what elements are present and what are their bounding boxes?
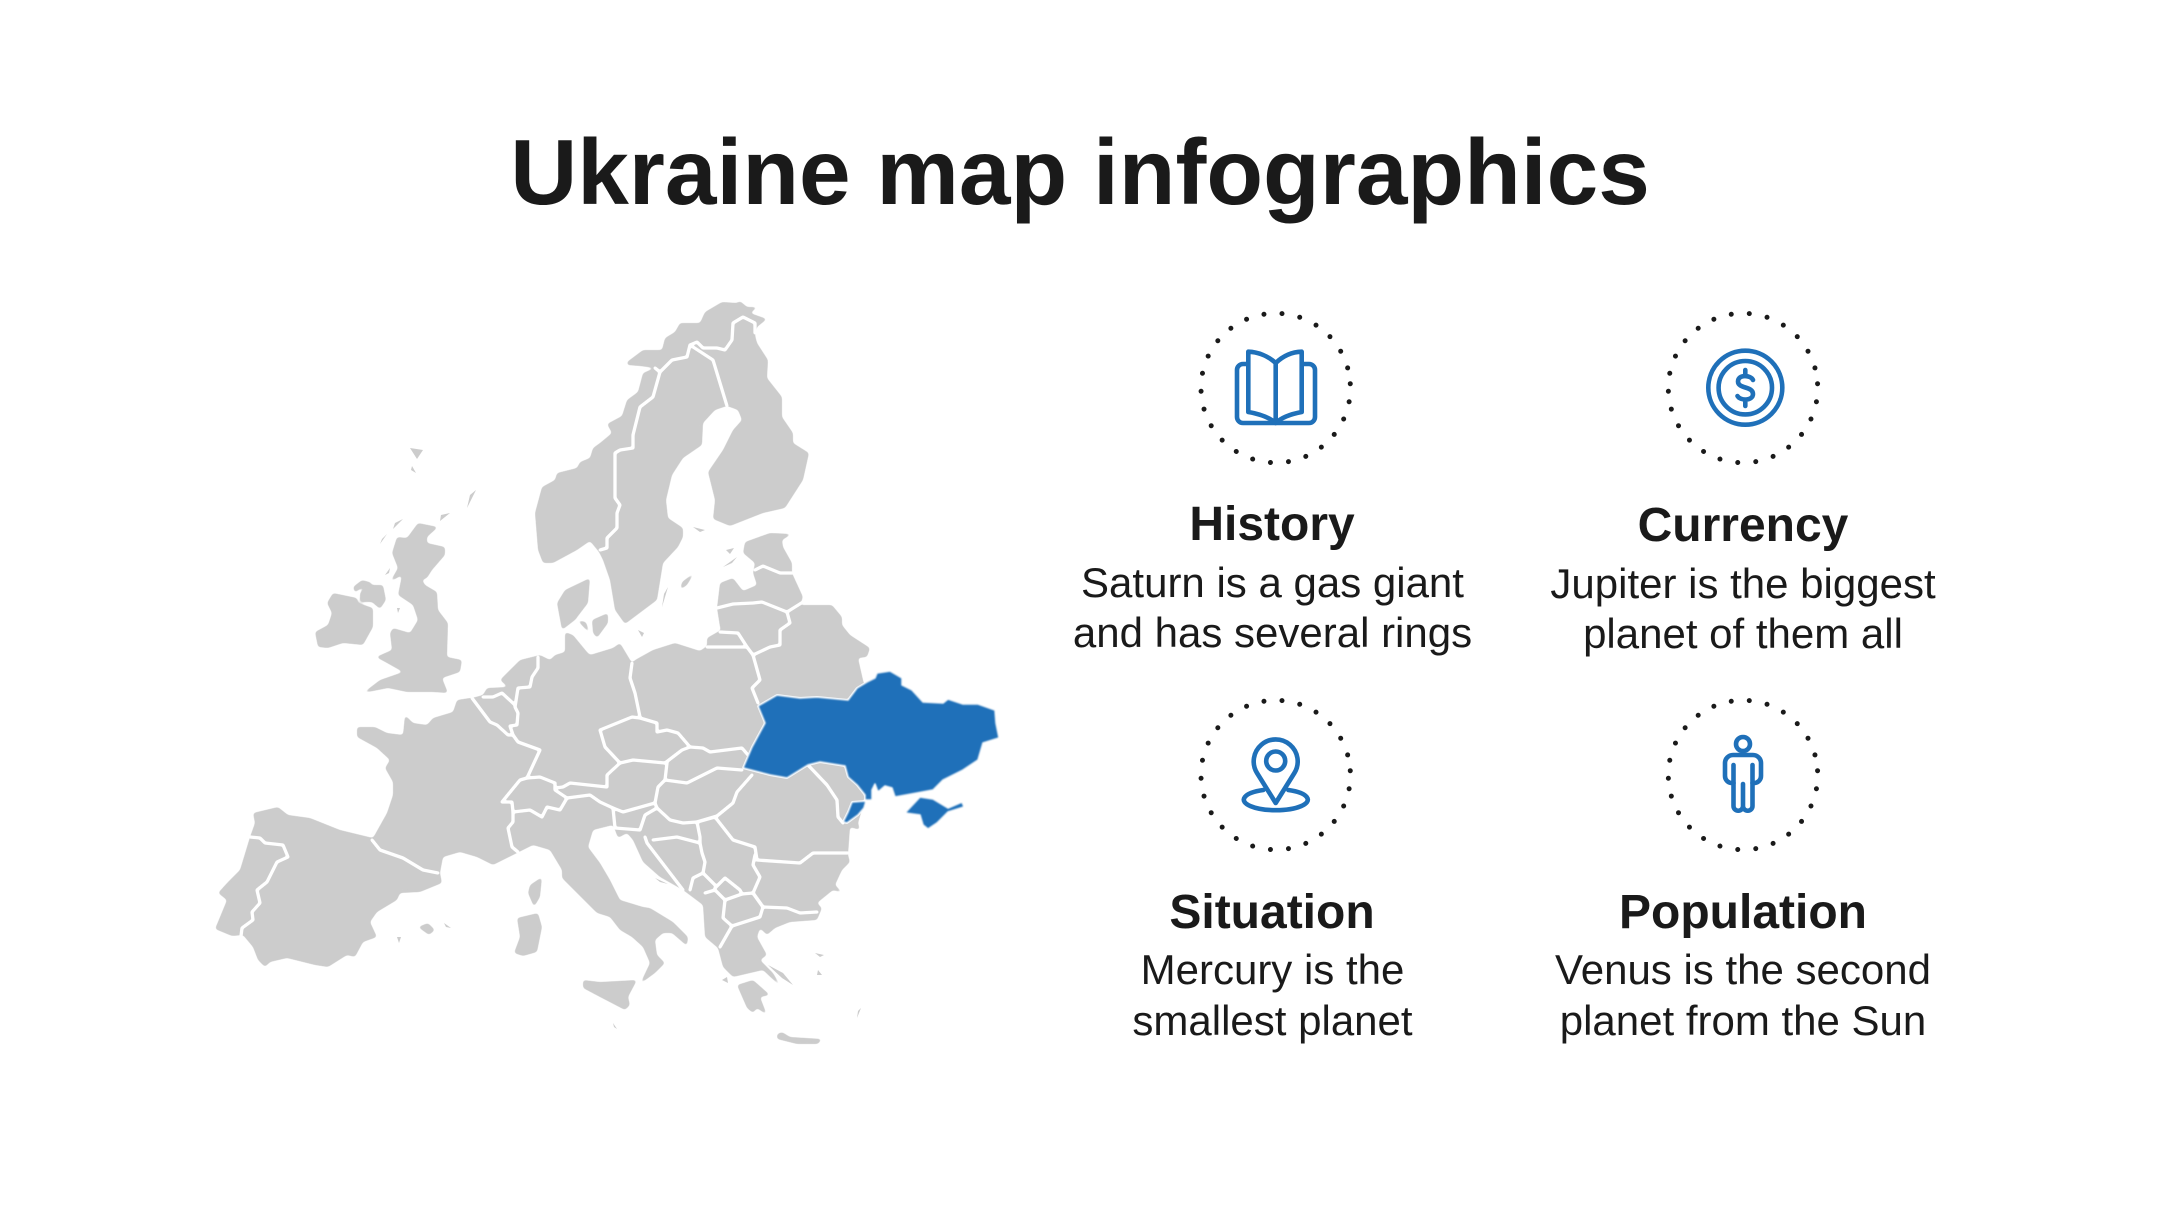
panel: Population	[1555, 696, 1931, 1044]
land: Denmark	[557, 578, 608, 638]
panel: Currency: planet of them all	[1583, 610, 1903, 657]
heading: Population	[1619, 886, 1867, 939]
icon: book in dotted circle	[1197, 309, 1355, 467]
Ukraine highlighted	[743, 671, 999, 829]
panel: Situation: smallest planet	[1132, 997, 1413, 1044]
land: Scandinavia	[535, 301, 809, 624]
map of Europe	[215, 301, 999, 1044]
heading: Currency	[1638, 499, 1849, 552]
heading: Situation	[1169, 886, 1375, 939]
text block: Jupiter is the biggest	[1550, 560, 1936, 607]
icon: dollar coin in dotted circle	[1664, 309, 1822, 467]
panel: Situation	[1132, 696, 1413, 1044]
small islands	[380, 448, 861, 1029]
title: Ukraine map infographics	[510, 120, 1650, 224]
land: Peloponnese	[737, 980, 770, 1015]
land: Great Britain	[363, 523, 462, 693]
panel: History	[1073, 309, 1472, 656]
text block: Mercury is the	[1141, 946, 1404, 993]
land masses	[215, 301, 875, 1044]
text block: Venus is the second	[1555, 946, 1931, 993]
heading: History	[1189, 498, 1355, 551]
country borders	[241, 317, 848, 947]
panel: Population: planet from the Sun	[1560, 997, 1926, 1044]
panel: Currency	[1550, 309, 1936, 657]
land: continental Europe	[215, 533, 875, 988]
panel: History: and has several rings	[1073, 609, 1472, 656]
large islands	[418, 572, 822, 1044]
icon: person in dotted circle	[1664, 696, 1822, 854]
text block: Saturn is a gas giant	[1081, 559, 1464, 606]
icon: location pin in dotted circle	[1197, 696, 1355, 854]
land: Ireland	[315, 580, 386, 648]
